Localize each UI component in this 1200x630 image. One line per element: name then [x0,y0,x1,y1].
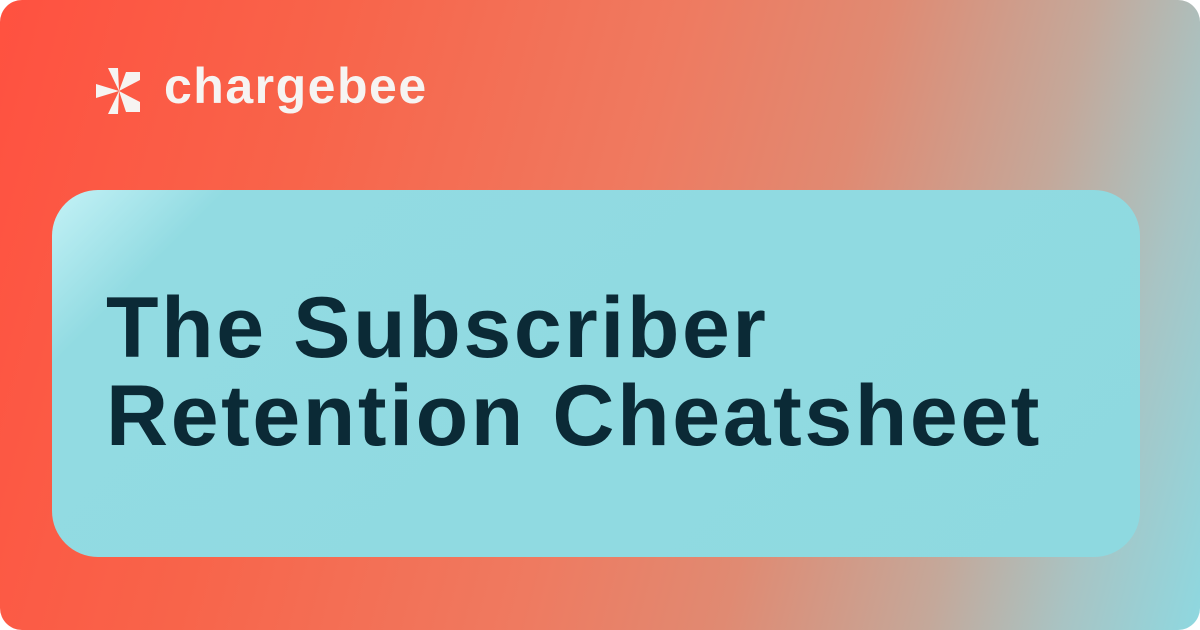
icon: chargebee mark [96,68,140,114]
title: Retention Cheatsheet [106,368,1042,464]
title: The Subscriber [106,280,768,376]
title [106,280,1042,464]
logo text: chargebee [164,58,428,114]
panel: title card [52,190,1140,557]
logo [96,58,428,114]
